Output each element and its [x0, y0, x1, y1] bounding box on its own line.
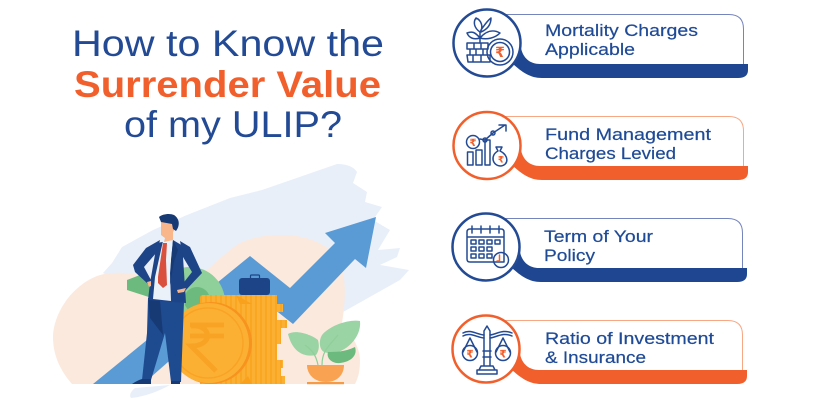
- icon: bar chart and money bag: ₹: [498, 156, 504, 166]
- label: Fund Management: [545, 126, 711, 144]
- icon: balance scale with rupee pans: ₹: [466, 348, 474, 360]
- briefcase: [239, 275, 270, 295]
- label: [544, 228, 654, 265]
- coin stack: [200, 295, 287, 384]
- shoes: [132, 379, 180, 384]
- title: of my ULIP?: [124, 104, 342, 145]
- title: Surrender Value: [74, 64, 381, 105]
- icon: bar chart and money bag: [454, 112, 520, 179]
- label: Term of Your: [544, 228, 654, 246]
- card: mortality charges: [454, 10, 748, 78]
- illustration: man with coins and growth arrow: [53, 164, 409, 398]
- label: Ratio of Investment: [545, 330, 714, 348]
- icon: bar chart and money bag: ₹: [470, 138, 477, 149]
- label: Mortality Charges: [545, 22, 698, 40]
- title: [72, 23, 384, 145]
- left arm: [133, 240, 160, 284]
- icon: balance scale with rupee pans: ₹: [499, 348, 507, 360]
- growth arrow: [93, 217, 376, 384]
- businessman: [132, 214, 202, 384]
- icon: plant on bricks with rupee coin: ₹: [495, 45, 505, 61]
- label: [545, 22, 698, 59]
- brush stroke bottom: [130, 385, 170, 398]
- icon: balance scale with rupee pans: [452, 316, 520, 382]
- tie: [158, 243, 167, 288]
- title: How to Know the: [72, 23, 384, 64]
- card: fund management: [454, 112, 748, 180]
- lapel: [170, 240, 178, 285]
- card: ratio of investment: [452, 316, 747, 384]
- icon: calendar with clock: [452, 214, 520, 280]
- label: Charges Levied: [545, 145, 676, 163]
- peach blob: [53, 235, 360, 384]
- label: [545, 330, 714, 367]
- right arm: [180, 241, 202, 291]
- hair: [159, 214, 179, 231]
- label: Policy: [544, 247, 596, 265]
- label: Applicable: [545, 41, 635, 59]
- trousers: [142, 298, 184, 382]
- large rupee coin: [169, 302, 252, 384]
- label: [545, 126, 711, 163]
- potted plant: [288, 321, 360, 384]
- card: term of policy: [452, 214, 747, 282]
- label: & Insurance: [545, 349, 646, 367]
- hands: [147, 281, 186, 293]
- shirt: [153, 240, 173, 301]
- neck and face: [161, 218, 177, 242]
- icon: plant on bricks with rupee coin: [454, 10, 520, 76]
- banknotes: [127, 267, 225, 337]
- jacket torso: [148, 240, 186, 303]
- brush background: [103, 164, 409, 330]
